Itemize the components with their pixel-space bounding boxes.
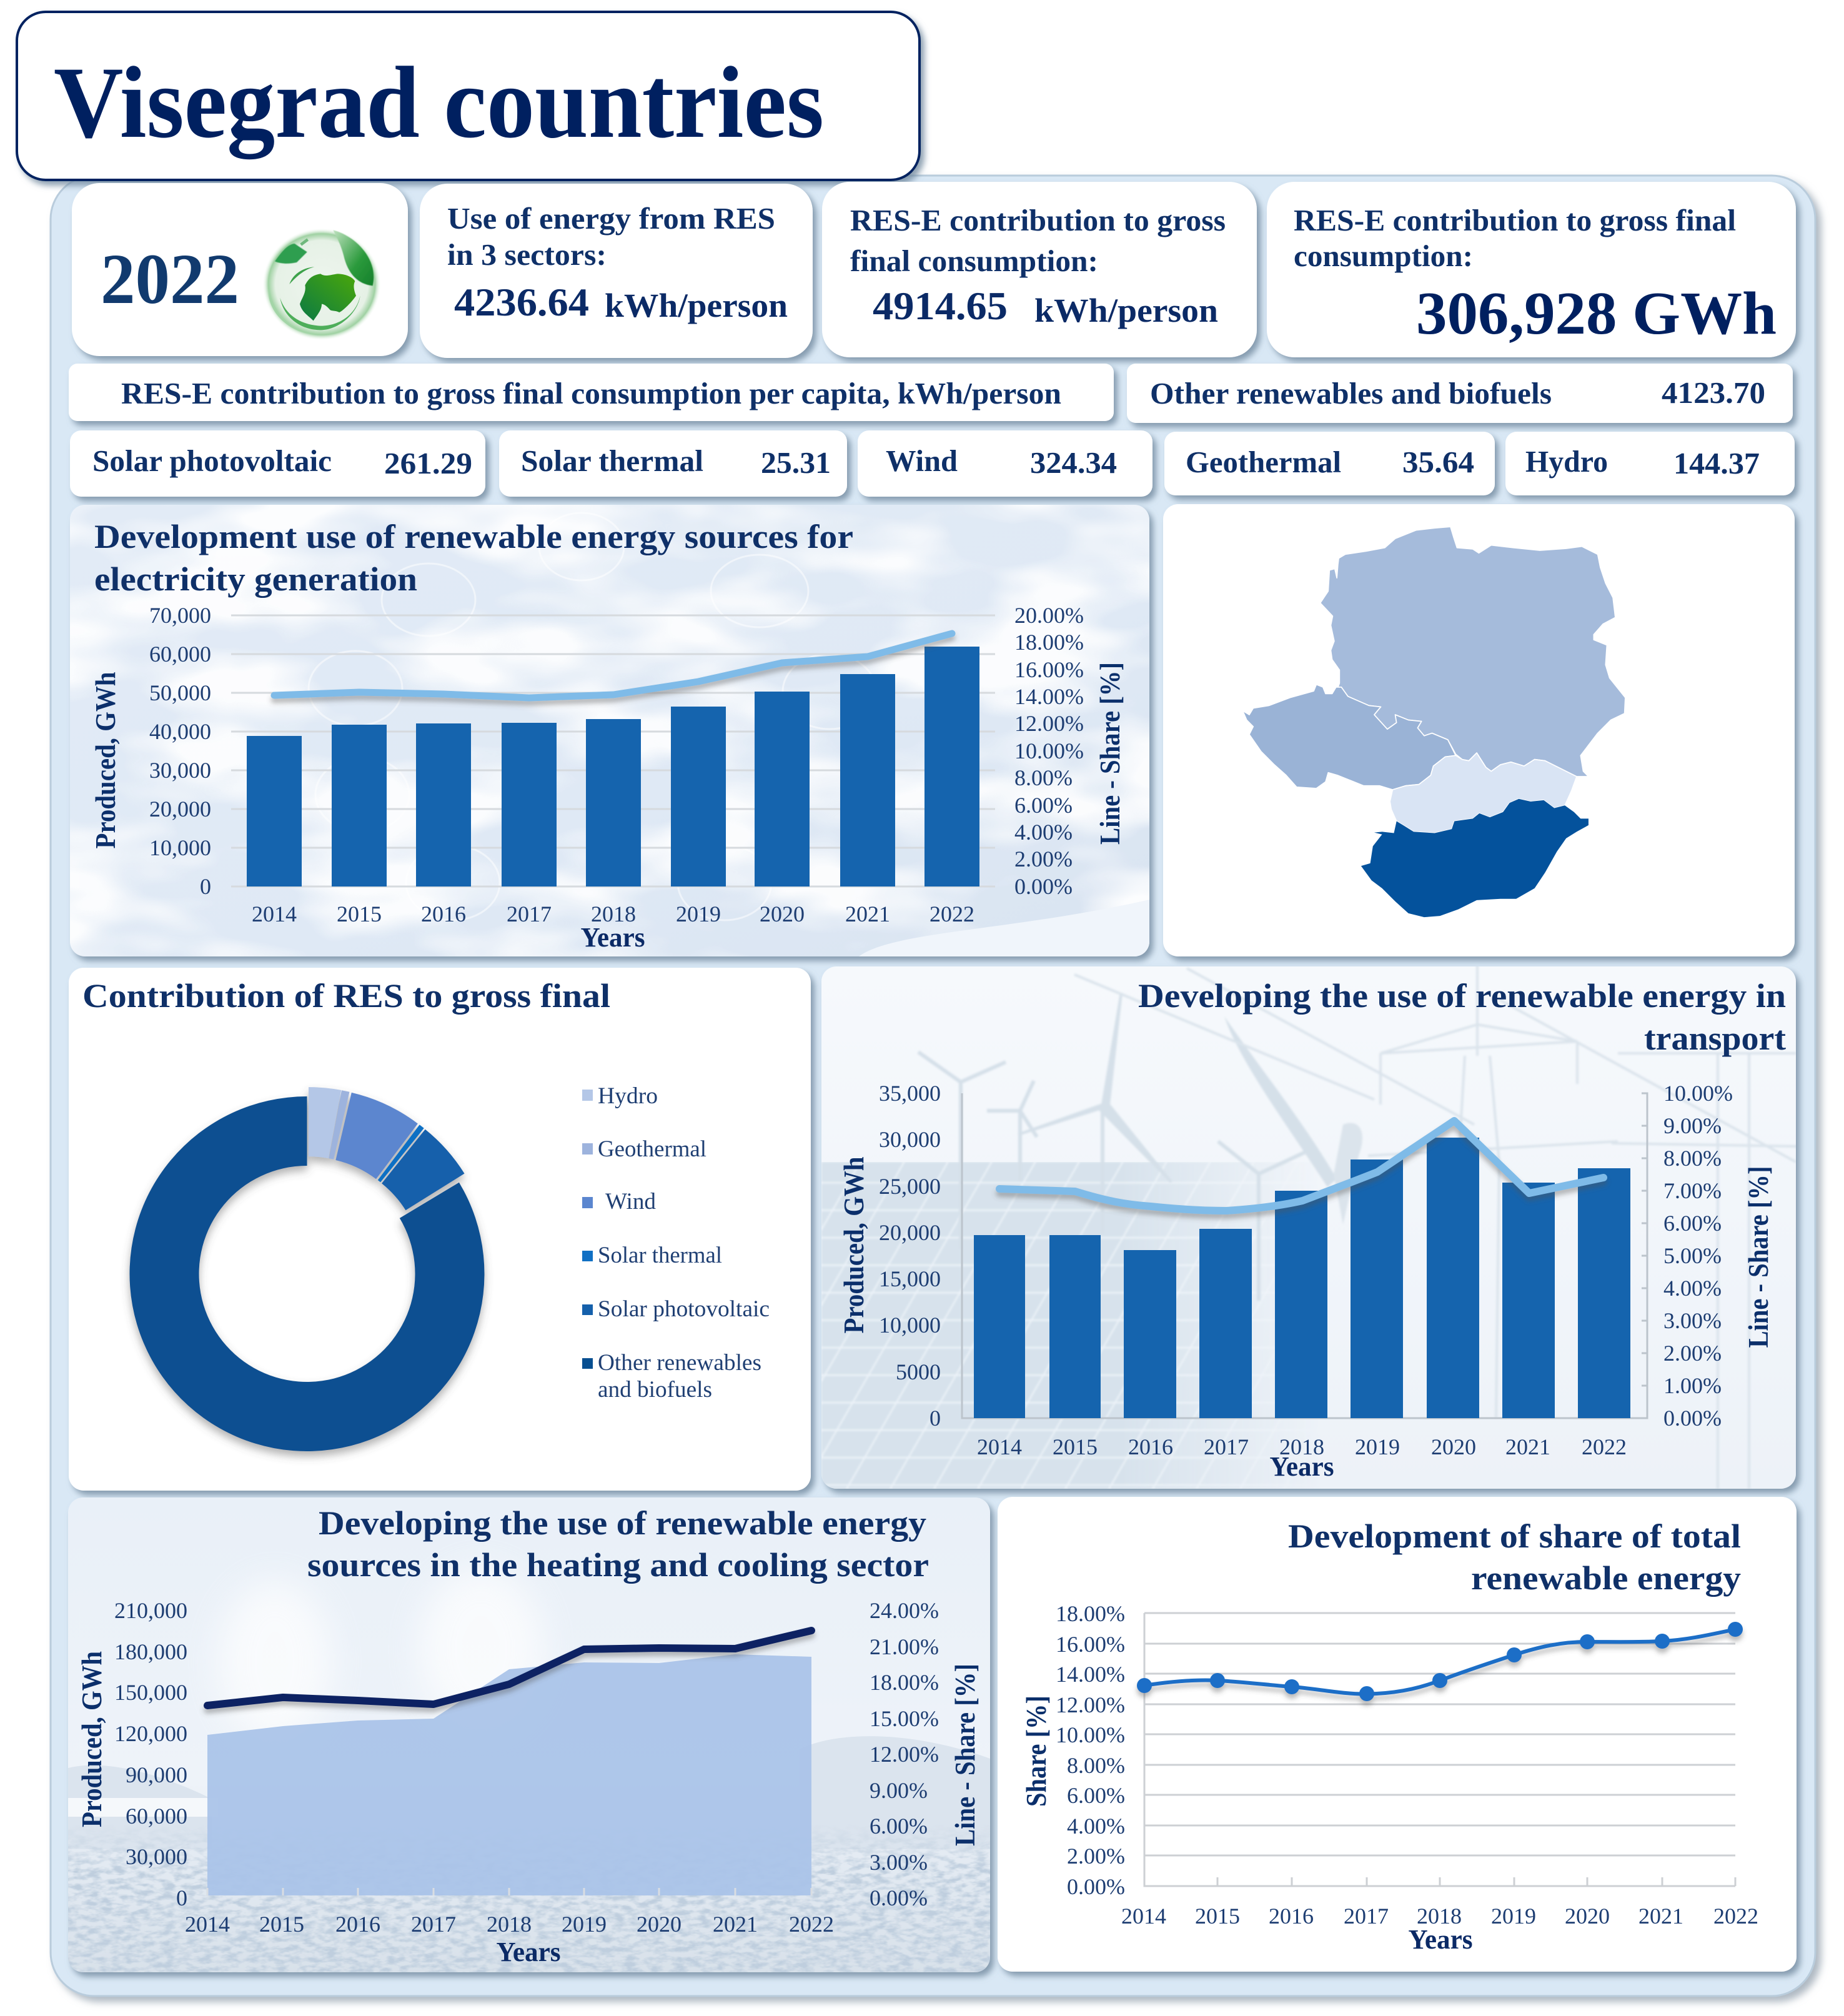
x axis labels: 2019 [562, 1912, 607, 1937]
right axis labels [870, 1598, 939, 1910]
card: year 2022 [72, 183, 408, 356]
card: energy from RES in 3 sectors: in 3 sectors: [447, 237, 607, 272]
x axis labels: 2021 [845, 901, 890, 926]
x axis labels: 2022 [789, 1912, 834, 1937]
right axis labels: 9.00% [870, 1778, 928, 1803]
x axis labels: 2018 [591, 901, 636, 926]
left axis labels: 20,000 [879, 1220, 941, 1245]
grid and axes [1144, 1613, 1735, 1886]
x axis labels: 2016 [335, 1912, 380, 1937]
right axis labels: 6.00% [1014, 793, 1073, 818]
left axis labels [149, 603, 211, 899]
y axis labels: 16.00% [1056, 1632, 1125, 1657]
heading: Developing the use of renewable energy in [1138, 977, 1786, 1015]
stat: geothermal [1164, 432, 1495, 495]
bar chart [962, 1093, 1647, 1418]
left axis labels: 5000 [896, 1359, 941, 1384]
stat: hydro [1505, 432, 1795, 495]
right axis labels [1014, 603, 1084, 899]
right axis title: Line - Share [%] [1094, 662, 1126, 845]
strip: other renewables: Other renewables and biofuels [1150, 376, 1552, 410]
legend: Solar photovoltaic [598, 1296, 770, 1322]
x axis title: Years [581, 922, 645, 953]
year: 2022 [101, 239, 239, 319]
panel: transport chart [821, 962, 1798, 1489]
x axis labels: 2017 [507, 901, 552, 926]
left axis labels: 10,000 [149, 835, 211, 860]
line chart [1137, 1622, 1743, 1701]
left axis labels: 120,000 [114, 1721, 187, 1746]
panel: heating and cooling chart [68, 1497, 990, 1972]
right axis labels [1663, 1081, 1733, 1431]
left axis title: Produced, GWh [90, 672, 121, 848]
legend: Hydro [598, 1083, 658, 1109]
right axis labels: 4.00% [1663, 1276, 1722, 1301]
heading: Development use of renewable energy sources for [94, 518, 853, 555]
legend: Wind [605, 1189, 656, 1214]
donut [129, 1087, 484, 1451]
legend: Other renewables [598, 1350, 761, 1376]
y axis labels: 0.00% [1067, 1874, 1125, 1899]
left axis labels: 60,000 [126, 1804, 187, 1829]
x axis title: Years [496, 1937, 561, 1967]
card: RES-E per person: RES-E contribution to gross [850, 203, 1226, 237]
right axis labels: 2.00% [1663, 1341, 1722, 1366]
left axis labels: 90,000 [126, 1762, 187, 1787]
right axis labels: 15.00% [870, 1706, 939, 1731]
title banner: Visegrad countries [54, 46, 824, 159]
card: energy from RES in 3 sectors: 4236.64 [454, 280, 589, 324]
stat: wind: Wind [886, 444, 958, 478]
x axis labels [1121, 1904, 1758, 1929]
x axis labels: 2022 [1713, 1904, 1758, 1929]
strip: other renewables: 4123.70 [1662, 375, 1765, 410]
right axis labels: 7.00% [1663, 1178, 1722, 1203]
line: share [274, 633, 952, 698]
y axis labels: 8.00% [1067, 1753, 1125, 1778]
x axis labels: 2014 [185, 1912, 230, 1937]
right axis labels: 2.00% [1014, 847, 1073, 871]
left axis labels: 60,000 [149, 642, 211, 667]
y axis title: Share [%] [1021, 1696, 1052, 1807]
legend: Geothermal [598, 1136, 706, 1162]
left axis labels: 15,000 [879, 1266, 941, 1291]
card: energy from RES in 3 sectors [420, 184, 813, 358]
x axis labels [252, 901, 974, 926]
heading: renewable energy [1471, 1559, 1741, 1597]
card: RES-E total GWh [1267, 182, 1796, 357]
x axis labels: 2020 [1565, 1904, 1610, 1929]
stat: solar photovoltaic [70, 430, 485, 497]
heading: Developing the use of renewable energy [319, 1504, 926, 1542]
left axis labels: 30,000 [126, 1844, 187, 1869]
right axis labels: 3.00% [1663, 1308, 1722, 1333]
x axis labels: 2018 [487, 1912, 532, 1937]
x axis labels: 2021 [1638, 1904, 1683, 1929]
right axis labels: 8.00% [1014, 765, 1073, 790]
right axis labels: 10.00% [1663, 1081, 1733, 1106]
right axis labels: 24.00% [870, 1598, 939, 1623]
card: energy from RES in 3 sectors: kWh/person [605, 287, 788, 324]
stat: hydro: 144.37 [1673, 446, 1760, 480]
left axis labels [879, 1081, 941, 1431]
right axis labels: 1.00% [1663, 1373, 1722, 1398]
left axis labels: 35,000 [879, 1081, 941, 1106]
card: RES-E total GWh: 306,928 GWh [1416, 280, 1777, 347]
heading: Contribution of RES to gross final [82, 977, 610, 1015]
icon: green globe droplet [262, 228, 381, 340]
legend: Solar thermal [598, 1243, 722, 1268]
left axis labels: 30,000 [879, 1127, 941, 1152]
card: RES-E total GWh: consumption: [1294, 239, 1473, 273]
y axis labels: 10.00% [1056, 1722, 1125, 1747]
right axis labels: 12.00% [1014, 711, 1084, 736]
left axis labels: 40,000 [149, 719, 211, 744]
left axis labels [114, 1598, 187, 1910]
legend: and biofuels [598, 1377, 712, 1403]
y axis labels: 12.00% [1056, 1692, 1125, 1717]
card: energy from RES in 3 sectors: Use of energy from RES [447, 201, 775, 236]
right axis labels: 3.00% [870, 1850, 928, 1875]
y axis labels: 18.00% [1056, 1601, 1125, 1626]
map: Hungary [1361, 799, 1589, 917]
heading [1138, 977, 1786, 1057]
heading: electricity generation [94, 560, 417, 598]
card: RES-E per person: 4914.65 [873, 284, 1008, 328]
x axis labels: 2015 [1195, 1904, 1240, 1929]
stat: solar thermal: Solar thermal [521, 444, 703, 478]
y axis labels: 4.00% [1067, 1814, 1125, 1839]
right axis labels: 6.00% [1663, 1211, 1722, 1236]
stat: geothermal: 35.64 [1402, 445, 1474, 479]
x axis labels: 2016 [1128, 1434, 1173, 1459]
x axis labels: 2019 [676, 901, 721, 926]
x axis labels: 2018 [1279, 1434, 1324, 1459]
right axis labels: 6.00% [870, 1814, 928, 1839]
x axis labels: 2020 [1431, 1434, 1476, 1459]
right axis labels: 4.00% [1014, 820, 1073, 845]
strip: per capita heading [69, 364, 1114, 421]
heading: transport [1644, 1020, 1786, 1057]
left axis labels: 70,000 [149, 603, 211, 628]
right axis labels: 16.00% [1014, 657, 1084, 682]
left axis labels: 0 [176, 1885, 187, 1910]
stat: solar photovoltaic: Solar photovoltaic [92, 444, 332, 478]
left axis labels: 20,000 [149, 797, 211, 822]
card: RES-E per person: kWh/person [1034, 292, 1218, 329]
right axis labels: 12.00% [870, 1742, 939, 1767]
x axis labels: 2014 [977, 1434, 1022, 1459]
x axis labels: 2017 [411, 1912, 456, 1937]
area chart [207, 1654, 811, 1895]
right axis labels: 18.00% [870, 1670, 939, 1695]
left axis labels: 10,000 [879, 1313, 941, 1338]
map: Czechia [1242, 685, 1455, 790]
right axis labels: 9.00% [1663, 1113, 1722, 1138]
title banner [17, 12, 920, 180]
right axis labels: 14.00% [1014, 684, 1084, 709]
x axis labels: 2019 [1491, 1904, 1536, 1929]
strip: per capita heading: RES-E contribution to gross final consumption per capita, kWh/person [121, 376, 1061, 410]
left axis labels: 150,000 [114, 1680, 187, 1705]
panel: donut chart [69, 968, 811, 1491]
x axis labels: 2014 [252, 901, 297, 926]
right axis labels: 18.00% [1014, 630, 1084, 655]
x axis labels: 2019 [1355, 1434, 1400, 1459]
x axis title: Years [1408, 1924, 1473, 1955]
x axis labels: 2017 [1344, 1904, 1389, 1929]
right axis labels: 21.00% [870, 1634, 939, 1659]
card: RES-E total GWh: RES-E contribution to gross final [1294, 203, 1736, 237]
x axis labels: 2015 [1053, 1434, 1098, 1459]
right axis labels: 5.00% [1663, 1243, 1722, 1268]
heading: Development of share of total [1288, 1517, 1741, 1555]
stat: solar thermal: 25.31 [761, 445, 831, 480]
left axis title: Produced, GWh [76, 1651, 107, 1827]
panel: share of total renewable energy [998, 1497, 1797, 1972]
right axis labels: 0.00% [1014, 874, 1073, 899]
x axis labels [977, 1434, 1627, 1459]
x axis labels: 2018 [1417, 1904, 1462, 1929]
right axis labels: 10.00% [1014, 738, 1084, 763]
line: share [999, 1121, 1604, 1211]
y axis labels: 6.00% [1067, 1783, 1125, 1808]
left axis labels: 210,000 [114, 1598, 187, 1623]
x axis labels: 2020 [760, 901, 805, 926]
stat: wind [858, 430, 1152, 497]
right axis labels: 8.00% [1663, 1146, 1722, 1171]
map: Poland [1321, 527, 1625, 777]
x axis labels: 2017 [1204, 1434, 1249, 1459]
left axis labels: 25,000 [879, 1174, 941, 1199]
left axis labels: 30,000 [149, 758, 211, 783]
right axis labels: 20.00% [1014, 603, 1084, 628]
x axis title: Years [1269, 1451, 1334, 1482]
x axis labels: 2020 [637, 1912, 682, 1937]
panel: map [1163, 504, 1795, 956]
y axis labels [1056, 1601, 1125, 1899]
axis ticks [207, 1888, 811, 1895]
y axis labels: 14.00% [1056, 1662, 1125, 1687]
strip: other renewables [1127, 364, 1793, 423]
x axis labels: 2022 [1582, 1434, 1627, 1459]
right axis labels: 0.00% [870, 1885, 928, 1910]
x axis labels [185, 1912, 834, 1937]
heading [307, 1504, 929, 1584]
panel: electricity chart [70, 505, 1149, 956]
left axis title: Produced, GWh [838, 1157, 870, 1333]
right axis title: Line - Share [%] [1743, 1166, 1774, 1348]
line: share [207, 1631, 811, 1706]
stat: wind: 324.34 [1030, 445, 1117, 480]
heading [94, 518, 853, 598]
right axis title: Line - Share [%] [949, 1664, 981, 1846]
x axis labels: 2021 [713, 1912, 758, 1937]
heading: sources in the heating and cooling sector [307, 1546, 929, 1584]
stat: geothermal: Geothermal [1186, 445, 1341, 479]
bar chart [231, 615, 995, 886]
heading [1288, 1517, 1741, 1597]
x axis labels: 2016 [1269, 1904, 1314, 1929]
stat: solar photovoltaic: 261.29 [384, 446, 472, 480]
left axis labels: 0 [929, 1406, 941, 1431]
x axis labels: 2015 [337, 901, 382, 926]
left axis labels: 0 [200, 874, 211, 899]
right axis labels: 0.00% [1663, 1406, 1722, 1431]
left axis labels: 50,000 [149, 680, 211, 705]
left axis labels: 180,000 [114, 1639, 187, 1664]
card: RES-E per person: final consumption: [850, 244, 1098, 278]
x axis labels: 2015 [259, 1912, 304, 1937]
x axis labels: 2021 [1505, 1434, 1550, 1459]
x axis labels: 2014 [1121, 1904, 1166, 1929]
card: RES-E per person [822, 182, 1257, 357]
map: Slovakia [1390, 753, 1577, 833]
y axis labels: 2.00% [1067, 1844, 1125, 1869]
legend [582, 1083, 770, 1403]
x axis labels: 2022 [929, 901, 974, 926]
stat: solar thermal [499, 430, 847, 497]
x axis labels: 2016 [421, 901, 466, 926]
stat: hydro: Hydro [1525, 444, 1608, 479]
